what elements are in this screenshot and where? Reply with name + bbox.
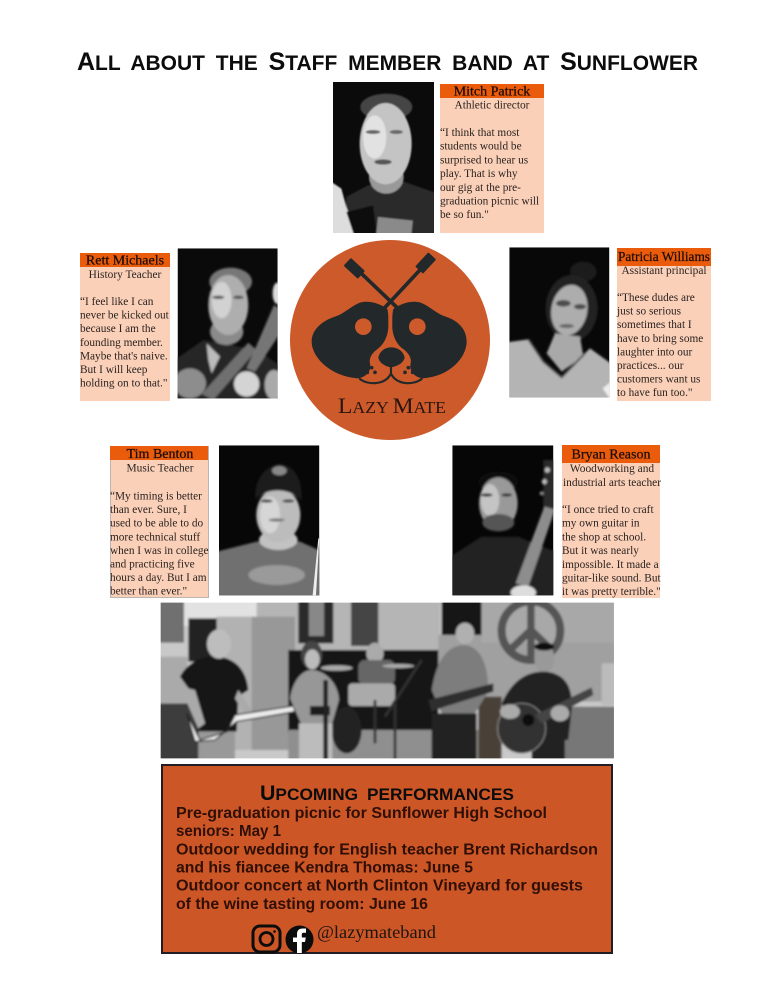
card: Rett Michaels: But I will keep [80, 364, 148, 376]
card: Bryan Reason: “I once tried to craft [562, 504, 654, 516]
card: Tim Benton: more technical stuff [110, 531, 200, 543]
card: Mitch Patrick: our gig at the pre- [440, 182, 521, 194]
card: Mitch Patrick: Mitch Patrick [454, 84, 530, 100]
photo: Patricia Williams [509, 247, 610, 398]
photo: Rett Michaels [178, 248, 278, 398]
card: Patricia Williams [616, 248, 711, 401]
card: Mitch Patrick [440, 84, 544, 233]
heading: upcoming performances: UPCOMING PERFORMANCES [260, 782, 514, 805]
card: Patricia Williams: Patricia Williams [618, 250, 710, 265]
card: Rett Michaels: Maybe that's naive. [80, 350, 168, 362]
list of performances: of the wine tasting room: June 16 [176, 896, 428, 913]
logo wordmark: LAZY MATE [338, 393, 446, 418]
list of performances [176, 805, 598, 913]
list of performances: seniors: May 1 [176, 823, 281, 840]
card: Bryan Reason: guitar-like sound. But [562, 572, 661, 584]
card: Rett Michaels: “I feel like I can [80, 296, 154, 308]
icon: crossed guitars and dog face [312, 252, 467, 378]
card: Tim Benton [110, 446, 209, 598]
card: Patricia Williams: practices... our [617, 360, 684, 372]
card: Bryan Reason: impossible. It made a [562, 559, 659, 571]
card: Patricia Williams: sometimes that I [617, 319, 692, 331]
panel: upcoming performances [162, 765, 612, 954]
card: Tim Benton: hours a day. But I am [110, 572, 207, 584]
drummer [366, 643, 384, 664]
card: Bryan Reason: Woodworking and [570, 463, 654, 475]
icon: facebook [286, 926, 314, 954]
title: ALL ABOUT THE STAFF MEMBER BAND AT SUNFLOWER [77, 48, 698, 76]
card: Rett Michaels [80, 253, 170, 401]
card: Rett Michaels: holding on to that." [80, 378, 167, 390]
icon: instagram [253, 926, 280, 952]
card: Mitch Patrick: be so fun." [440, 209, 489, 221]
card: Rett Michaels: because I am the [80, 323, 156, 335]
card: Tim Benton: than ever. Sure, I [110, 504, 187, 516]
card: Mitch Patrick: graduation picnic will [440, 196, 539, 208]
list of performances: and his fiancee Kendra Thomas: June 5 [176, 860, 473, 876]
singer [301, 641, 322, 669]
card: Patricia Williams: just so serious [616, 306, 681, 318]
card: Tim Benton: and practicing five [110, 558, 195, 570]
photo: band performing [160, 602, 614, 758]
list of performances: Pre-graduation picnic for Sunflower High School [176, 805, 547, 822]
list of performances: Outdoor wedding for English teacher Brent Richardson [176, 842, 598, 858]
card: Patricia Williams: Assistant principal [621, 265, 707, 277]
card: Bryan Reason: Bryan Reason [572, 448, 650, 462]
card: Bryan Reason: But it was nearly [562, 545, 639, 557]
card: Rett Michaels: founding member. [80, 337, 163, 349]
card: Tim Benton: used to be able to do [110, 518, 204, 530]
card: Rett Michaels: History Teacher [89, 269, 162, 281]
card: Mitch Patrick: play. That is why [440, 168, 518, 180]
right guitarist [533, 647, 555, 664]
card: Patricia Williams: laughter into our [617, 346, 693, 358]
social handle: @lazymateband [317, 922, 436, 942]
card: Bryan Reason: it was pretty terrible." [562, 586, 661, 598]
card: Tim Benton: when I was in college [110, 545, 209, 557]
card: Mitch Patrick: “I think that most [440, 127, 520, 139]
guitarist left [180, 656, 248, 732]
list of performances: Outdoor concert at North Clinton Vineyard for guests [176, 878, 583, 894]
card: Mitch Patrick: students would be [440, 141, 522, 153]
card: Patricia Williams: have to bring some [617, 333, 703, 345]
card: Tim Benton: “My timing is better [110, 490, 202, 502]
card: Rett Michaels: never be kicked out [80, 310, 170, 322]
photo: Tim Benton [219, 445, 320, 596]
card: Tim Benton: Music Teacher [126, 462, 194, 474]
card: Bryan Reason: industrial arts teacher [563, 477, 661, 489]
card: Bryan Reason [562, 445, 661, 598]
card: Mitch Patrick: Athletic director [455, 100, 530, 112]
card: Tim Benton: better than ever." [110, 586, 187, 598]
card: Tim Benton: Tim Benton [127, 447, 193, 462]
card: Patricia Williams: “These dudes are [617, 292, 695, 304]
card: Mitch Patrick: surprised to hear us [440, 154, 528, 166]
plaid guitarist [456, 623, 474, 644]
photo: Mitch Patrick [333, 82, 434, 233]
photo: Bryan Reason [452, 445, 554, 596]
card: Patricia Williams: to have fun too." [617, 387, 693, 399]
card: Rett Michaels: Rett Michaels [86, 254, 164, 268]
card: Patricia Williams: customers want us [617, 374, 700, 386]
logo: Lazy Mate band badge [290, 240, 490, 440]
card: Bryan Reason: my own guitar in [562, 518, 640, 530]
card: Bryan Reason: the shop at school. [562, 531, 646, 543]
